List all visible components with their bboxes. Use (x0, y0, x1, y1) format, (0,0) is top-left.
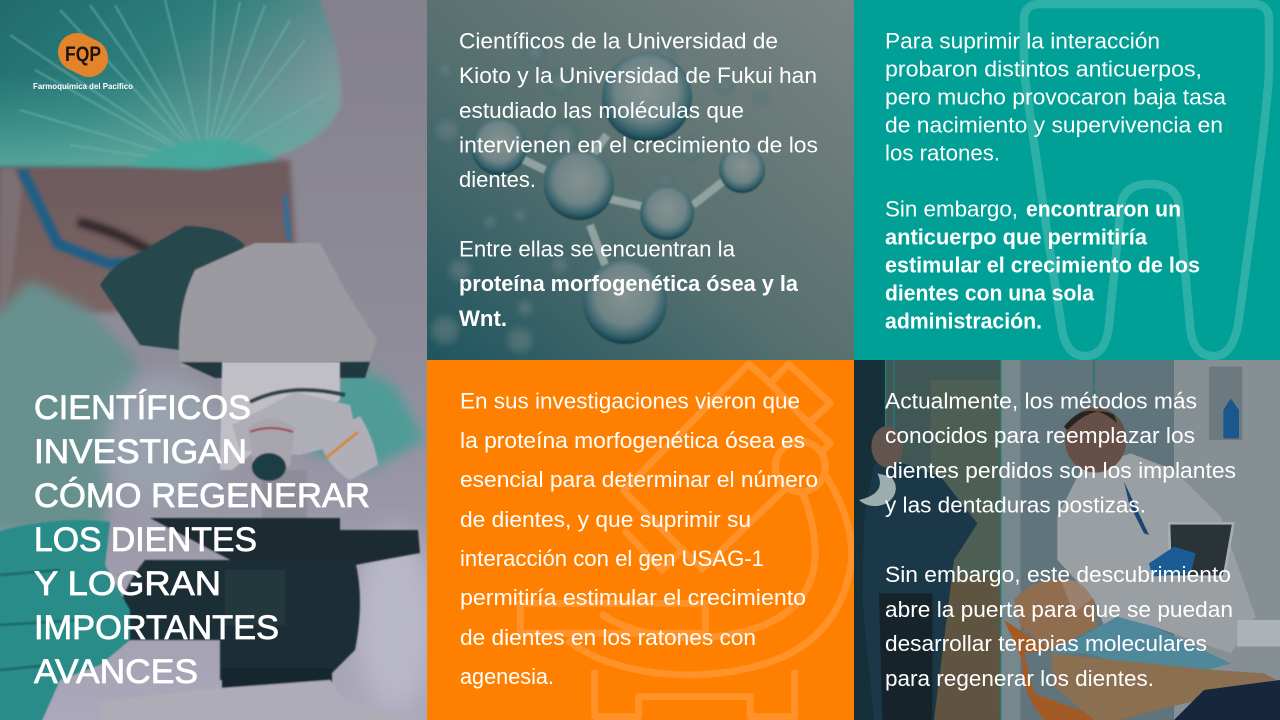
text block: anticuerpos: administración. (885, 308, 1042, 334)
text block: terapias moleculares: para regenerar los dientes. (885, 666, 1154, 691)
panel: teal with tooth (854, 0, 1280, 360)
title: AVANCES (34, 653, 198, 691)
text block: moléculas: Entre ellas se encuentran la (459, 236, 736, 262)
title (34, 389, 370, 691)
text block: anticuerpos: de nacimiento y supervivencia en (885, 112, 1223, 138)
text block: moléculas: Wnt. (459, 306, 507, 331)
text block: moléculas: Kioto y la Universidad de Fukui han (459, 63, 817, 88)
text block: terapias moleculares: desarrollar terapias moleculares (885, 631, 1207, 656)
text block: terapias moleculares: Actualmente, los métodos más (885, 388, 1197, 414)
text block: proteína morfogenética: agenesia. (460, 664, 554, 689)
photo: glass molecule model (471, 52, 765, 344)
title: CÓMO REGENERAR (34, 477, 370, 515)
title: LOS DIENTES (34, 521, 257, 559)
text block: moléculas: proteína morfogenética ósea y la (459, 271, 799, 296)
photo: mask and coat (0, 280, 435, 710)
photo: clinic scene (854, 360, 1280, 720)
photo: teal gloved fingers (0, 520, 130, 720)
panel: molecules photo with text (427, 0, 854, 360)
panel: orange with microscope (427, 360, 854, 720)
text block: anticuerpos: estimular el crecimiento de los (885, 252, 1200, 278)
text block: anticuerpos: dientes con una sola (885, 280, 1095, 306)
text block: anticuerpos: los ratones. (885, 140, 1000, 166)
title: Y LOGRAN (34, 565, 221, 603)
text block: proteína morfogenética: de dientes, y que suprimir su (460, 507, 751, 532)
text block: moléculas: dientes. (459, 167, 536, 192)
text block: moléculas: estudiado las moléculas que (459, 98, 744, 123)
text block: anticuerpos: pero mucho provocaron baja tasa (885, 84, 1227, 110)
photo: microscope eyepiece and head (100, 226, 377, 378)
text block: proteína morfogenética: En sus investigaciones vieron que (460, 388, 800, 414)
text block: proteína morfogenética: interacción con el gen USAG-1 (460, 546, 764, 571)
logo: Farmoquímica del Pacífico (33, 43, 133, 91)
text block: anticuerpos (885, 28, 1227, 334)
logo: Farmoquímica del Pacífico: Farmoquímica del Pacífico (33, 82, 133, 91)
photo: microscope stage and body (122, 517, 421, 714)
title: INVESTIGAN (34, 433, 247, 471)
panel: scientist with microscope photo and title (0, 0, 435, 720)
text block: terapias moleculares: y las dentaduras postizas. (885, 492, 1146, 518)
text block: proteína morfogenética (460, 388, 818, 689)
text block: proteína morfogenética: de dientes en los ratones con (460, 625, 756, 650)
logo: Farmoquímica del Pacífico: FQP (65, 43, 101, 66)
text block: moléculas: intervienen en el crecimiento de los (459, 132, 818, 158)
photo: surgical cap (0, 0, 341, 170)
text block: proteína morfogenética: la proteína morfogenética ósea es (460, 428, 805, 453)
panel: dental clinic photo with text (854, 360, 1280, 720)
text block: proteína morfogenética: permitiría estimular el crecimiento (460, 585, 806, 610)
text block: moléculas (459, 28, 818, 331)
text block: anticuerpos: anticuerpo que permitiría (885, 224, 1148, 250)
icon: tooth outline (1024, 4, 1269, 356)
text block: moléculas: Científicos de la Universidad de (459, 28, 778, 54)
photo: face and mask strap (0, 160, 296, 330)
text block: anticuerpos: Para suprimir la interacción (885, 28, 1160, 54)
text block: anticuerpos: encontraron un (1026, 196, 1181, 222)
text block: terapias moleculares: conocidos para reemplazar los (885, 423, 1195, 448)
icon: microscope outline (520, 364, 852, 717)
photo: blurred background molecules (429, 41, 767, 355)
text block: anticuerpos: probaron distintos anticuerpos, (885, 56, 1202, 82)
text block: anticuerpos: Sin embargo, (885, 196, 1018, 222)
photo: microscope column and objectives (220, 362, 378, 520)
text block: terapias moleculares: Sin embargo, este descubrimiento (885, 562, 1231, 587)
text block: terapias moleculares (885, 388, 1236, 691)
title: IMPORTANTES (34, 609, 279, 647)
text block: proteína morfogenética: esencial para determinar el número (460, 467, 818, 492)
title: CIENTÍFICOS (34, 389, 251, 427)
text block: terapias moleculares: abre la puerta para que se puedan (885, 597, 1233, 622)
text block: terapias moleculares: dientes perdidos son los implantes (885, 458, 1236, 483)
